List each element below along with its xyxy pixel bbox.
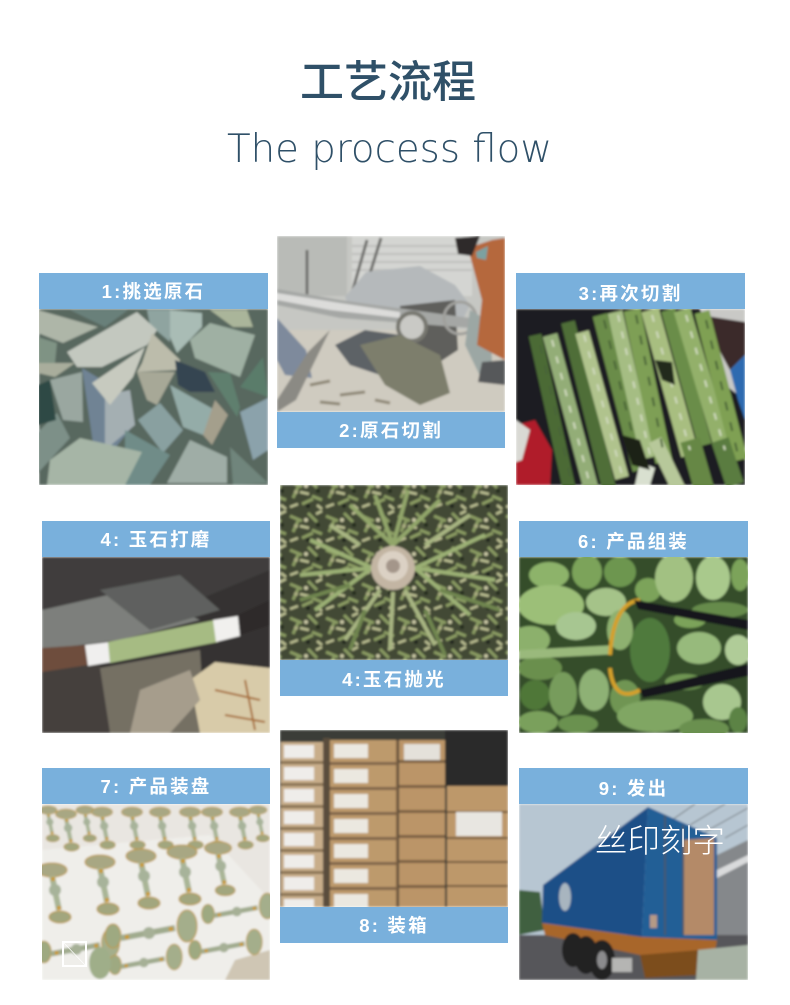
photo: jade grinding xyxy=(42,557,270,733)
panel: step 7 xyxy=(37,768,275,980)
photo: cut jade bars xyxy=(516,309,745,492)
photo: rollers in foam tray xyxy=(37,804,275,980)
header bar: step 4 grinding xyxy=(42,521,270,557)
header bar: step 8 xyxy=(280,907,508,943)
header bar: step 1 xyxy=(39,273,268,309)
photo: packed cartons xyxy=(280,730,508,907)
panel: step 6 xyxy=(510,521,751,739)
panel: step 9 xyxy=(519,768,748,980)
label: step 7: 7: 产品装盘 xyxy=(100,776,212,797)
label: step 2: 2:原石切割 xyxy=(339,420,443,441)
panel: step 1 xyxy=(38,273,268,485)
panel: step 4 grinding xyxy=(42,521,270,733)
header bar: step 3 xyxy=(516,273,745,309)
label: step 5: 4:玉石抛光 xyxy=(342,669,446,690)
label: step 9: 9: 发出 xyxy=(599,778,668,799)
header bar: step 6 xyxy=(519,521,748,557)
subtitle: The process flow xyxy=(227,127,552,172)
panel: step 8 xyxy=(280,730,508,943)
label: step 1: 1:挑选原石 xyxy=(102,281,205,302)
header bar: step 9 xyxy=(519,768,748,804)
photo: raw stones xyxy=(38,309,268,485)
header bar: step 5 xyxy=(280,660,508,696)
label: step 6: 6: 产品组装 xyxy=(578,531,689,552)
label: step 8: 8: 装箱 xyxy=(359,915,429,936)
panel: step 5 polishing xyxy=(280,485,508,696)
title: 工艺流程 xyxy=(300,58,476,107)
photo: container truck xyxy=(519,804,748,980)
label: step 4 grinding: 4: 玉石打磨 xyxy=(100,529,212,550)
photo: cutting raw stone xyxy=(277,236,505,412)
icon: white square marker xyxy=(63,942,86,966)
header bar: step 2 xyxy=(277,412,505,448)
photo: assembling rollers xyxy=(510,554,751,739)
overlay text: 丝印刻字 xyxy=(595,823,725,859)
panel: step 3 xyxy=(516,273,745,492)
photo: jade polishing xyxy=(280,485,508,660)
panel: step 2 xyxy=(277,236,505,448)
header bar: step 7 xyxy=(42,768,270,804)
label: step 3: 3:再次切割 xyxy=(579,283,682,304)
